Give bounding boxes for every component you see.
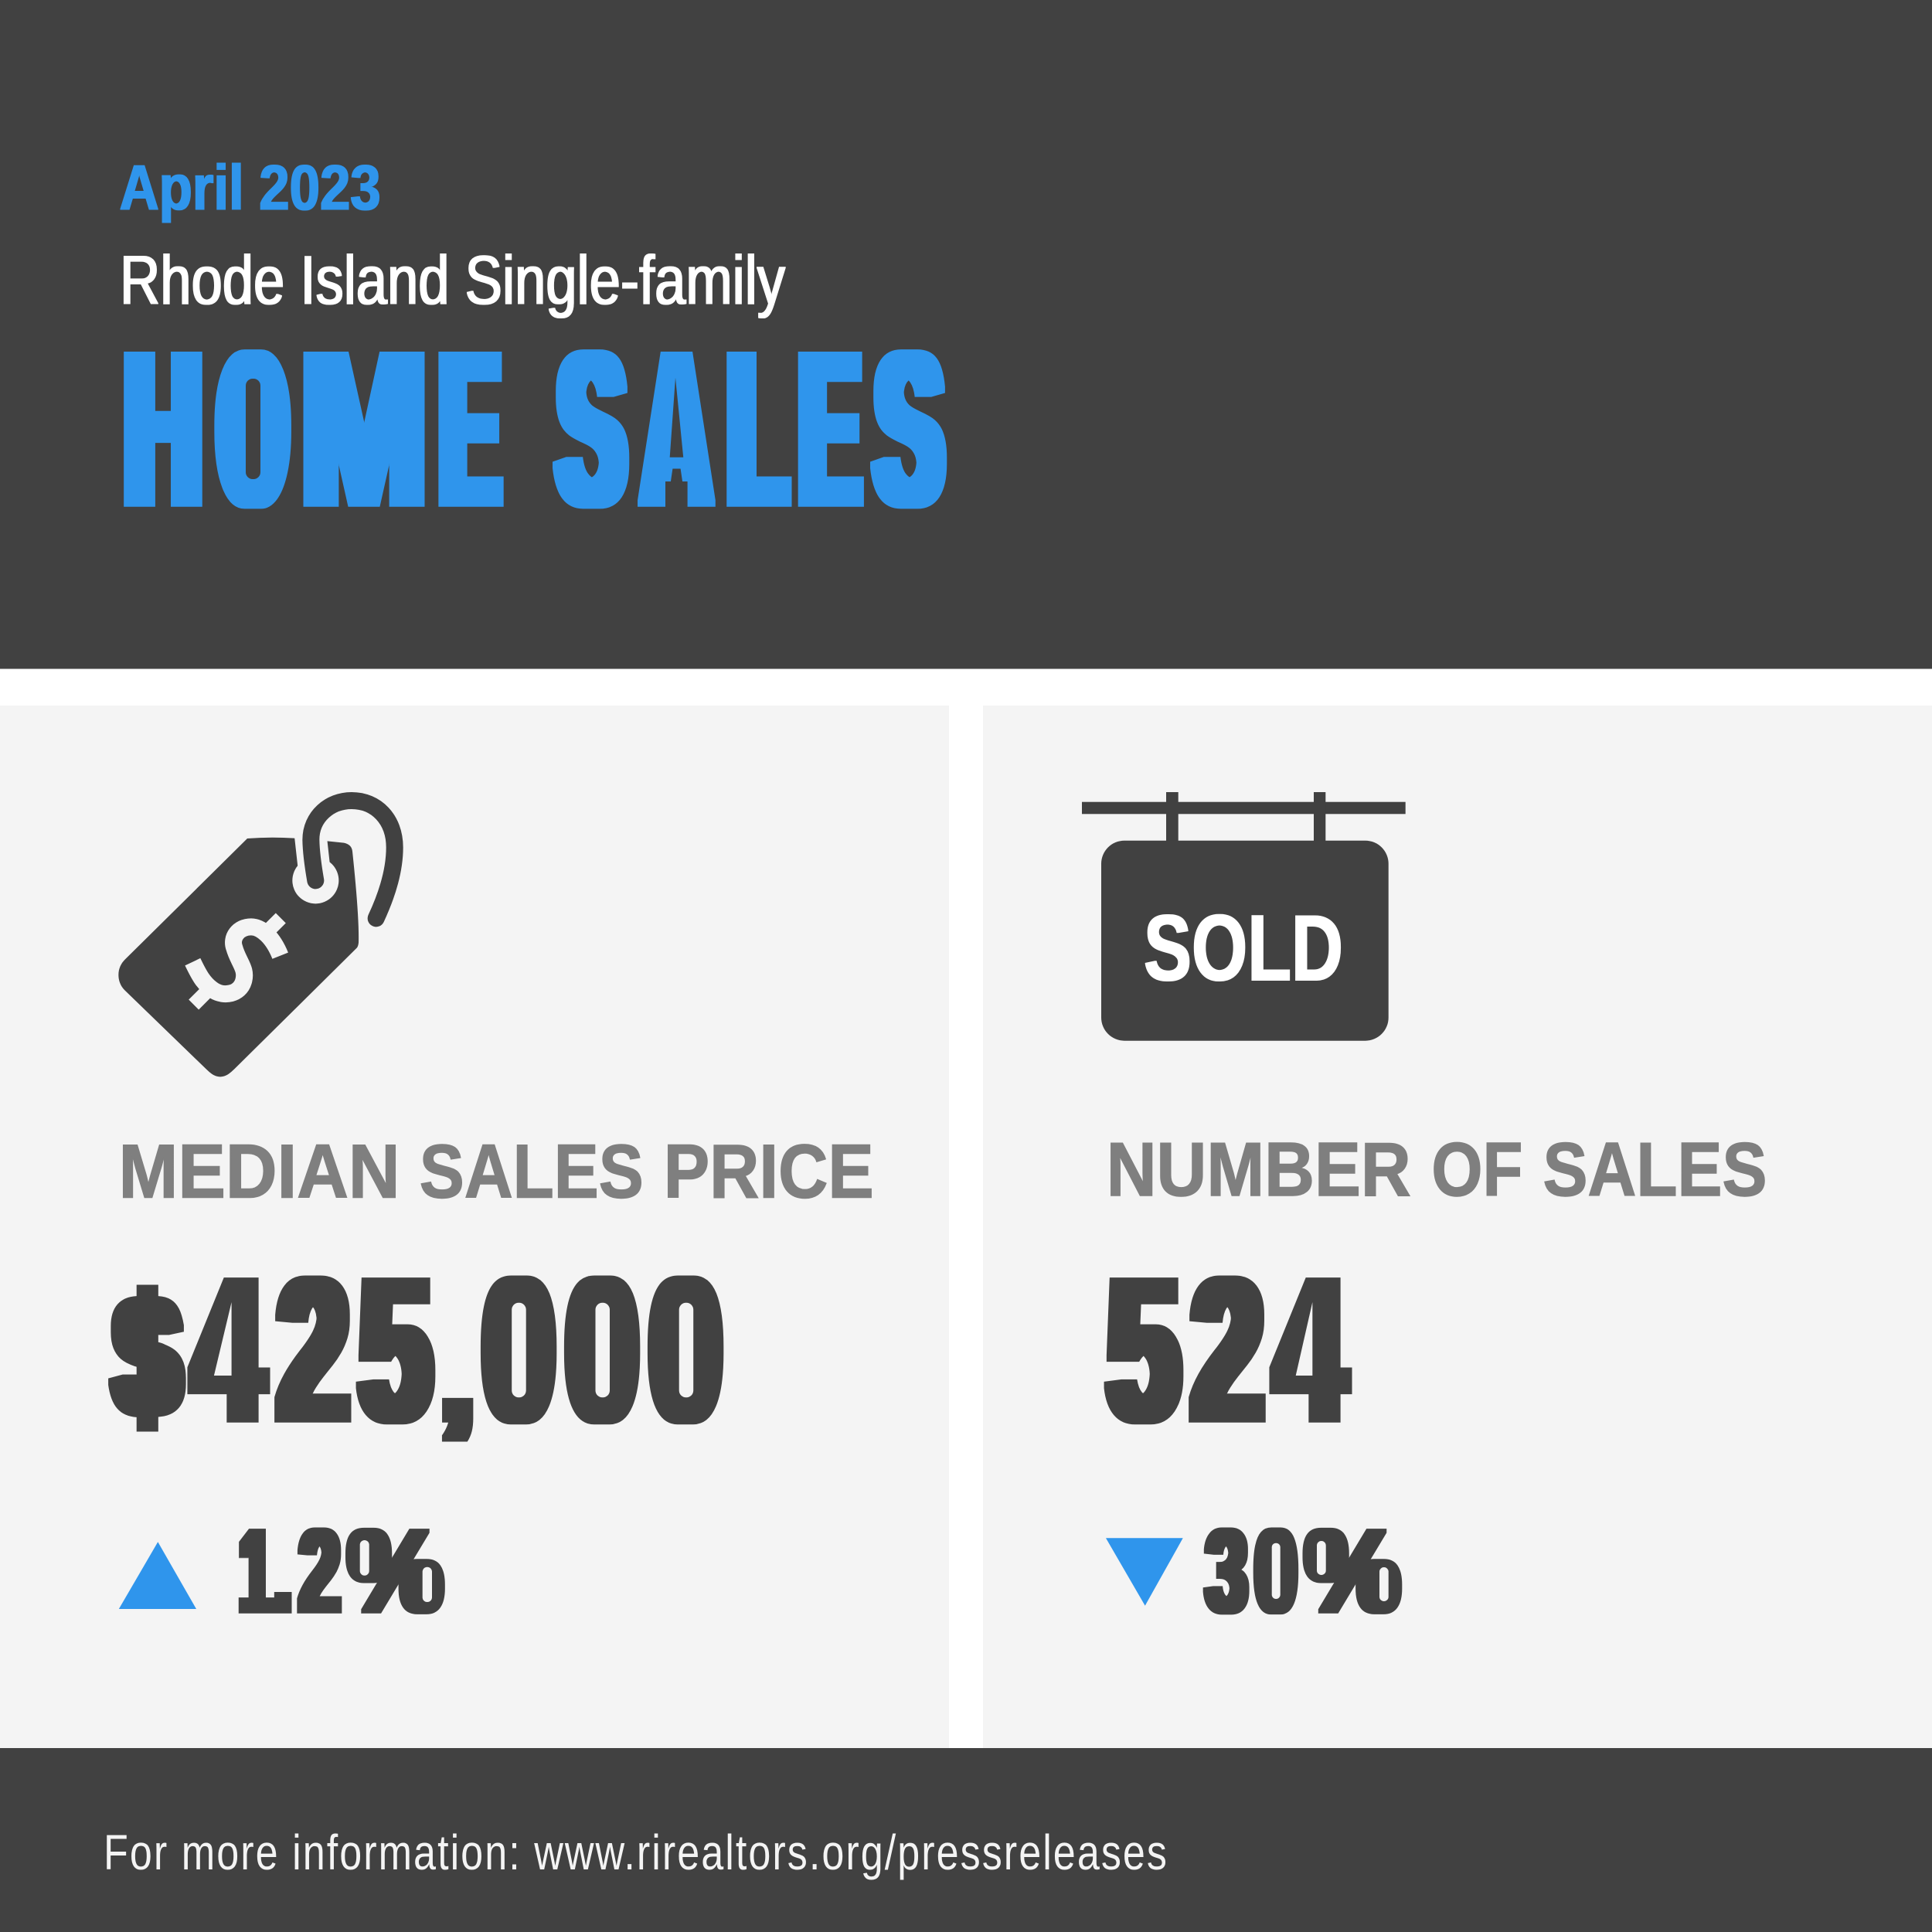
title: HOME SALES: E: [801, 309, 859, 550]
change: 30%: %: [1304, 1505, 1400, 1637]
title: HOME SALES: A: [643, 309, 709, 550]
date line: April 2023: April 2023: [120, 151, 381, 223]
heading: MEDIAN SALES PRICE: MEDIAN: [119, 1129, 400, 1214]
panel: median sales price: [0, 706, 949, 1748]
change: 1.2%: %: [348, 1505, 444, 1637]
sign text: SOLD: SOLD: [1144, 895, 1343, 1000]
value: $425,000: 5: [359, 1238, 431, 1463]
value: $425,000: 0: [483, 1238, 554, 1463]
title: HOME SALES: L: [728, 309, 787, 550]
value: $425,000: 4: [193, 1238, 264, 1463]
heading: MEDIAN SALES PRICE: PRICE: [664, 1129, 874, 1214]
value: $425,000: 0: [650, 1238, 721, 1463]
heading: NUMBER OF SALES: SALES: [1543, 1127, 1767, 1212]
footer band: [0, 1748, 1932, 1932]
change: 1.2%: 2: [299, 1505, 340, 1637]
title: HOME SALES: O: [219, 309, 287, 550]
icon: price tag: [118, 801, 395, 1077]
icon: sold sign: [1082, 792, 1406, 1041]
value: $425,000: 2: [277, 1238, 349, 1463]
footer text: For more information: www.rirealtors.org/pressreleases: [104, 1825, 1168, 1880]
value: $425,000: ,: [442, 1308, 473, 1446]
icon: down triangle: [1106, 1538, 1183, 1606]
value: 524: 2: [1192, 1238, 1263, 1463]
change: 30%: 3: [1206, 1505, 1247, 1637]
value: 524: 4: [1275, 1238, 1345, 1463]
value: 524: 5: [1107, 1238, 1179, 1463]
icon: up triangle: [119, 1542, 196, 1609]
value: $425,000: 0: [566, 1238, 638, 1463]
panel: number of sales: [983, 706, 1932, 1748]
heading: MEDIAN SALES PRICE: SALES: [420, 1129, 644, 1214]
title: HOME SALES: E: [440, 309, 499, 550]
value: $425,000: $: [114, 1260, 180, 1453]
text: S: [876, 309, 943, 550]
change: 1.2%: .: [275, 1505, 291, 1637]
title: HOME SALES: H: [125, 309, 201, 550]
heading: NUMBER OF SALES: NUMBER: [1107, 1127, 1411, 1212]
change: 30%: 0: [1255, 1505, 1297, 1637]
title: HOME SALES: M: [301, 309, 427, 550]
title: HOME SALES: S: [558, 309, 625, 550]
change: 1.2%: 1: [240, 1505, 272, 1637]
subtitle: Rhode Island Single-family: Rhode Island Single-family: [120, 241, 785, 318]
heading: NUMBER OF SALES: OF: [1431, 1127, 1522, 1212]
